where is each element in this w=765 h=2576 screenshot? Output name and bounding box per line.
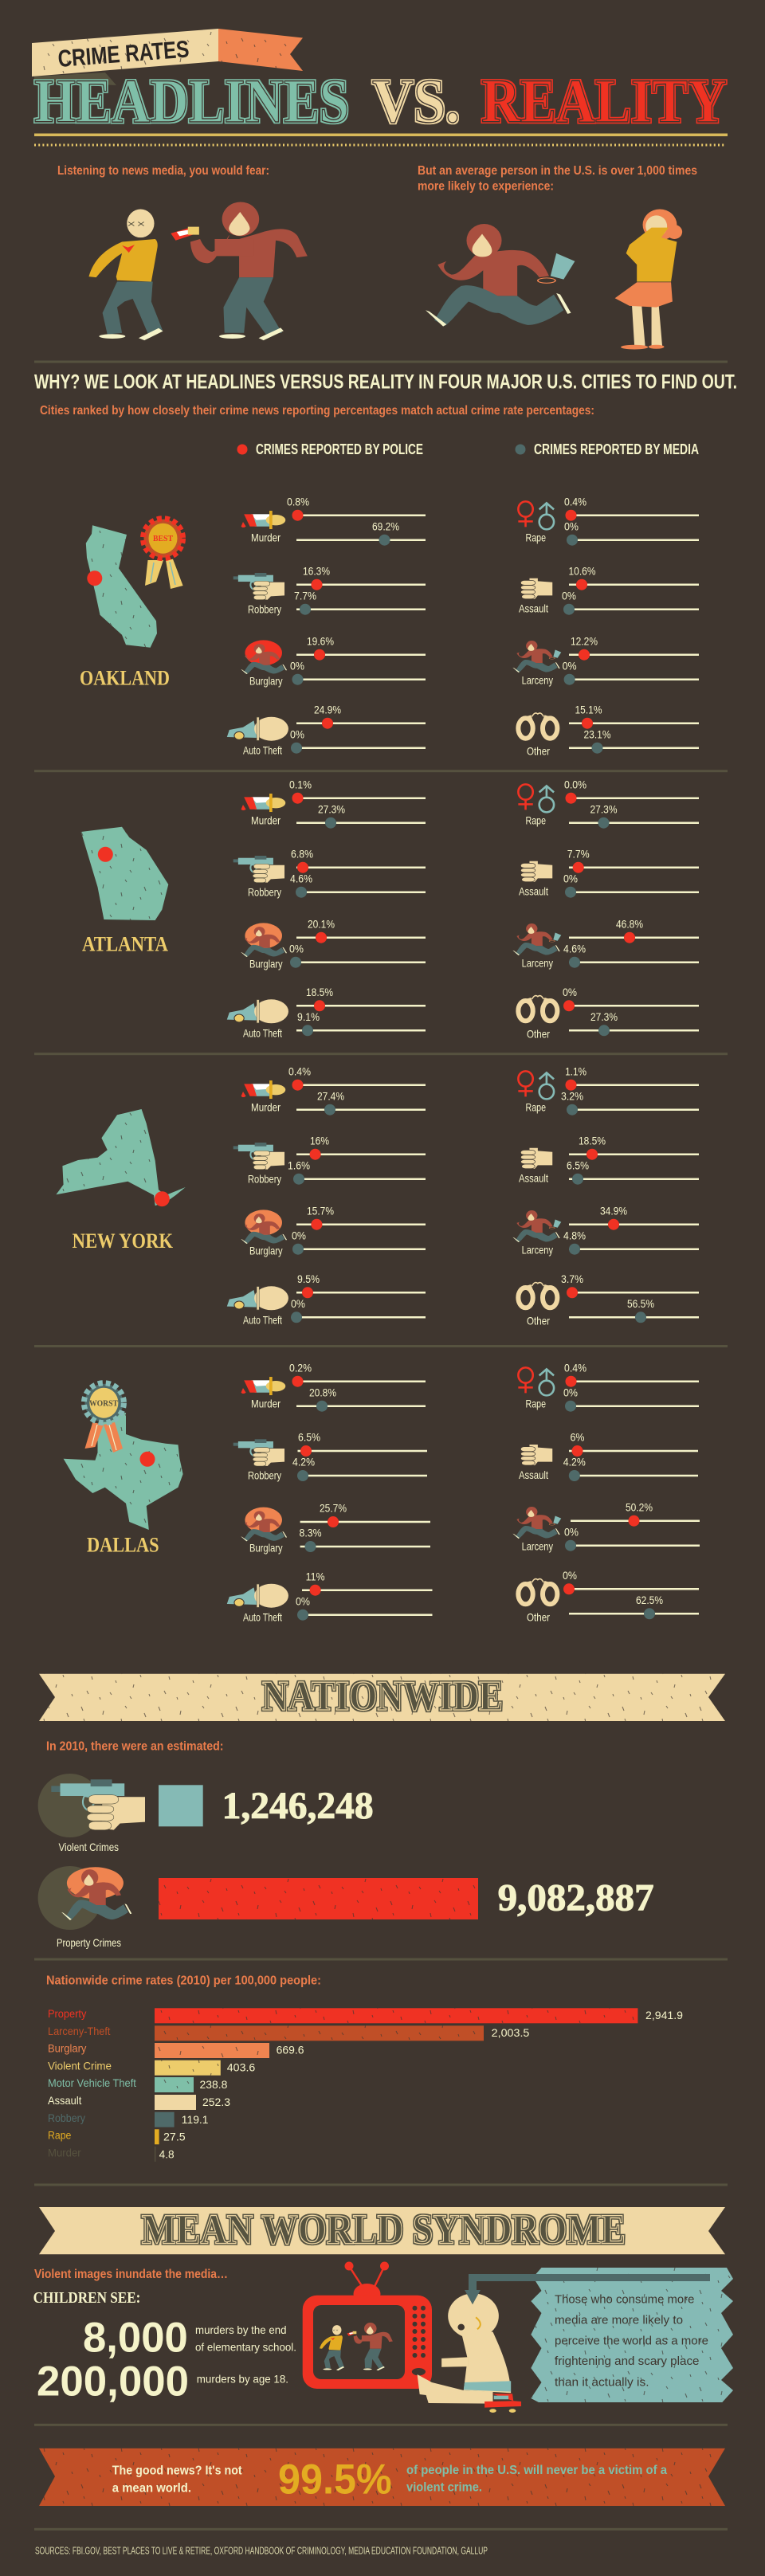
stat: 8,000 — [83, 2315, 296, 2362]
bar: larceny-theft: 2,003.5 — [492, 2026, 530, 2039]
row: robbery — [233, 847, 426, 898]
row: other: Other — [527, 1610, 550, 1623]
row: burglary: Burglary — [249, 957, 283, 970]
bar: assault — [48, 2094, 230, 2110]
row: assault — [519, 1431, 698, 1481]
city name: Atlanta: ATLANTA — [82, 932, 168, 955]
row: robbery: 4.2% — [292, 1456, 315, 1468]
row: burglary: Burglary — [249, 1244, 283, 1257]
row: auto theft: 9.5% — [297, 1272, 320, 1285]
row: other — [518, 1569, 699, 1623]
row: murder: Murder — [251, 531, 280, 544]
callout: media perception — [531, 2268, 733, 2402]
bar: murder — [48, 2146, 175, 2162]
row: assault — [519, 564, 699, 615]
subheading: violent images: Violent images inundate the media… — [34, 2268, 228, 2281]
row: murder: 69.2% — [372, 520, 399, 532]
row: auto theft: 18.5% — [306, 986, 333, 998]
bar: murder: 4.8 — [159, 2147, 175, 2160]
row: murder: 0.4% — [288, 1065, 311, 1077]
intro text: experience: more likely to experience: — [418, 180, 554, 194]
banner: nationwide: NATIONWIDE — [262, 1673, 503, 1719]
row: assault: 0% — [563, 872, 578, 884]
banner: mean world syndrome: MEAN WORLD SYNDROME — [142, 2207, 626, 2253]
row: other: 27.3% — [590, 1010, 618, 1023]
row: assault: Assault — [519, 1468, 548, 1481]
legend: police — [237, 441, 423, 457]
callout: media perception: perceive the world as a more — [555, 2335, 708, 2348]
row: rape: 1.1% — [565, 1065, 586, 1077]
stat: 200,000 — [37, 2358, 288, 2405]
stat: 200,000: 200,000 — [37, 2358, 189, 2405]
row: murder: 0.8% — [287, 495, 309, 508]
row: other: Other — [527, 1027, 550, 1040]
label: violent crimes: Violent Crimes — [59, 1841, 119, 1853]
row: murder — [241, 1361, 426, 1412]
row: murder: 20.8% — [309, 1386, 336, 1398]
row: auto theft: 9.1% — [297, 1010, 320, 1023]
row: burglary: 19.6% — [307, 634, 334, 647]
row: assault: 7.7% — [567, 847, 590, 860]
row: robbery: 16% — [310, 1134, 329, 1147]
row: larceny: Larceny — [522, 956, 553, 969]
banner: nationwide — [39, 1673, 725, 1721]
row: murder: Murder — [251, 814, 280, 827]
banner: good news: The good news? It's not — [112, 2464, 242, 2478]
row: larceny: 12.2% — [571, 634, 598, 647]
row: auto theft — [227, 1272, 426, 1326]
row: larceny — [512, 1204, 699, 1256]
panel: Dallas — [64, 1361, 700, 1624]
title: HEADLINES — [34, 66, 349, 135]
bar: larceny-theft: Larceny-Theft — [48, 2025, 110, 2037]
bar: assault: Assault — [48, 2094, 81, 2107]
bar: motor vehicle theft: 238.8 — [199, 2078, 228, 2091]
row: burglary — [241, 917, 426, 970]
bar: violent crimes — [159, 1785, 203, 1826]
row: other: 15.1% — [575, 703, 602, 716]
number: property crimes: 9,082,887 — [498, 1877, 654, 1919]
intro text: experience: But an average person in the U.S. is over 1,000 times — [418, 164, 697, 178]
callout: media perception: Those who consume more — [555, 2294, 694, 2307]
bar: property: Property — [48, 2007, 86, 2020]
row: robbery: 7.7% — [294, 589, 316, 602]
row: other: 62.5% — [636, 1594, 663, 1606]
subheading: ranking: Cities ranked by how closely their crime news reporting percentages match actual crime rate percentages: — [40, 404, 594, 418]
label: property crimes: Property Crimes — [57, 1936, 121, 1949]
row: robbery — [233, 1431, 427, 1482]
row: robbery: Robbery — [248, 885, 281, 898]
row: larceny: 50.2% — [626, 1500, 653, 1513]
row: rape — [518, 495, 699, 546]
banner: good news: 99.5% — [278, 2456, 392, 2503]
row: larceny: 4.6% — [563, 942, 586, 955]
bar: robbery: Robbery — [48, 2111, 85, 2124]
bar: larceny-theft — [48, 2025, 530, 2041]
banner: good news — [39, 2449, 725, 2506]
bar: rape: 27.5 — [163, 2131, 186, 2143]
row: murder: 27.3% — [318, 802, 345, 815]
row: assault: Assault — [519, 885, 548, 898]
stat: 8,000: murders by the end — [195, 2323, 287, 2336]
row: larceny: 46.8% — [616, 917, 643, 930]
row: assault: Assault — [519, 1172, 548, 1185]
row: auto theft — [227, 986, 426, 1039]
illustration: baby with toy car — [412, 2293, 521, 2413]
banner: good news: of people in the U.S. will never be a victim of a — [406, 2464, 667, 2477]
illustration: television — [303, 2261, 432, 2389]
bar: robbery — [48, 2111, 209, 2127]
row: robbery: Robbery — [248, 1469, 281, 1482]
row: robbery: Robbery — [248, 602, 281, 615]
bar: violent crime: 403.6 — [227, 2060, 256, 2073]
icon: property crimes thief — [38, 1866, 131, 1930]
row: auto theft — [227, 1570, 432, 1624]
row: robbery: 4.6% — [290, 872, 312, 884]
illustration: thief running with bag — [426, 224, 575, 327]
bar: assault: 252.3 — [202, 2096, 230, 2108]
row: other: 0% — [563, 986, 577, 998]
city name: New York: NEW YORK — [73, 1229, 174, 1253]
title: REALITY — [481, 66, 727, 135]
bar: property — [48, 2007, 683, 2023]
banner: crime rates: CRIME RATES — [57, 36, 190, 73]
bar: motor vehicle theft: Motor Vehicle Theft — [48, 2076, 136, 2089]
row: auto theft: Auto Theft — [243, 1026, 282, 1039]
row: burglary: Burglary — [249, 1542, 283, 1555]
row: auto theft: 0% — [290, 727, 304, 740]
intro text: experience — [418, 164, 697, 194]
row: other: Other — [527, 1314, 550, 1327]
title: VS. — [372, 66, 460, 135]
row: assault: Assault — [519, 602, 548, 615]
row: auto theft: Auto Theft — [243, 1313, 282, 1326]
row: rape: Rape — [526, 1100, 546, 1113]
subheading: crime rates per 100,000: Nationwide crime rates (2010) per 100,000 people: — [46, 1974, 321, 1988]
row: auto theft: 0% — [291, 1297, 305, 1310]
row: other: Other — [527, 745, 550, 758]
row: rape: Rape — [526, 1397, 546, 1410]
row: larceny: 34.9% — [600, 1204, 627, 1217]
icon: violent crimes gun — [38, 1774, 145, 1837]
row: burglary: Burglary — [249, 674, 283, 687]
row: robbery: 16.3% — [303, 564, 330, 577]
title — [34, 66, 727, 135]
row: other — [518, 703, 699, 758]
bar: robbery: 119.1 — [182, 2113, 209, 2126]
row: assault: 10.6% — [569, 564, 596, 577]
row: larceny: 0% — [563, 659, 577, 672]
row: auto theft: 24.9% — [314, 703, 341, 716]
badge: worst: WORST — [89, 1399, 119, 1409]
map: New York state — [56, 1109, 186, 1206]
stat: 200,000: murders by age 18. — [197, 2373, 288, 2386]
row: rape — [518, 778, 699, 829]
banner: crime rates — [32, 29, 303, 85]
row: murder — [241, 1065, 426, 1115]
row: auto theft: 0% — [296, 1594, 310, 1607]
map: Georgia — [81, 827, 168, 920]
subheading: estimated: In 2010, there were an estimated: — [46, 1740, 223, 1754]
row: rape: 0% — [564, 520, 579, 532]
row: assault: 4.2% — [563, 1456, 586, 1468]
row: rape: 27.3% — [590, 802, 617, 815]
panel: New York — [56, 1065, 699, 1327]
row: murder — [241, 778, 426, 829]
bar: burglary — [48, 2042, 304, 2058]
bar: rape: Rape — [48, 2129, 72, 2142]
bar: murder: Murder — [48, 2146, 81, 2158]
heading: children see: CHILDREN SEE: — [33, 2289, 140, 2307]
row: rape: 0.4% — [564, 1361, 586, 1374]
row: rape — [518, 1065, 699, 1115]
row: rape: 0.4% — [564, 495, 586, 508]
bar: burglary: 669.6 — [277, 2044, 304, 2056]
stat: 8,000: of elementary school. — [195, 2341, 296, 2354]
row: rape: Rape — [526, 531, 546, 543]
row: assault: 18.5% — [579, 1134, 606, 1147]
row: burglary — [241, 1204, 426, 1257]
map: Texas — [64, 1413, 183, 1530]
banner: good news: violent crime. — [406, 2481, 482, 2495]
city name: Dallas: DALLAS — [87, 1533, 159, 1556]
row: assault: 6% — [571, 1431, 585, 1444]
row: larceny: Larceny — [522, 1243, 553, 1256]
callout: media perception: than it actually is. — [555, 2376, 649, 2389]
bar: property crimes — [159, 1878, 478, 1919]
row: rape: 3.2% — [561, 1089, 583, 1102]
bar chart: nationwide rates — [48, 2007, 683, 2162]
row: robbery: 6.8% — [291, 847, 313, 860]
row: auto theft: 11% — [306, 1570, 325, 1582]
illustration: frightened woman — [615, 209, 682, 350]
stat: 8,000: 8,000 — [83, 2315, 188, 2362]
row: murder — [241, 495, 426, 546]
row: rape: Rape — [526, 814, 546, 826]
row: assault: 0% — [562, 589, 576, 602]
row: murder: Murder — [251, 1101, 280, 1114]
row: burglary: 20.1% — [308, 917, 335, 930]
row: burglary: 25.7% — [320, 1502, 347, 1515]
panel: Oakland — [80, 495, 699, 758]
legend: police: CRIMES REPORTED BY POLICE — [256, 441, 423, 457]
row: assault: 6.5% — [567, 1159, 589, 1171]
legend: media: CRIMES REPORTED BY MEDIA — [534, 441, 699, 457]
callout: media perception: media are more likely to — [555, 2315, 683, 2327]
row: burglary: 15.7% — [307, 1204, 334, 1217]
row: auto theft: Auto Theft — [243, 744, 282, 757]
bar: burglary: Burglary — [48, 2042, 86, 2055]
row: robbery: 1.6% — [288, 1159, 310, 1171]
intro text: fear: Listening to news media, you would fear: — [57, 164, 269, 178]
row: burglary — [241, 1502, 430, 1555]
row: other: 0% — [563, 1569, 577, 1582]
row: larceny: 0% — [564, 1525, 579, 1538]
row: burglary: 8.3% — [300, 1527, 322, 1539]
city name: Oakland: OAKLAND — [80, 666, 170, 689]
row: murder: Murder — [251, 1398, 280, 1410]
row: assault — [519, 847, 699, 898]
row: larceny — [512, 1500, 700, 1552]
sources: SOURCES: FBI.GOV, BEST PLACES TO LIVE & RETIRE, OXFORD HANDBOOK OF CRIMINOLOGY, MEDIA EDUCATION FOUNDATION, GALLUP — [35, 2545, 488, 2557]
illustration: victim and attacker — [88, 202, 308, 340]
row: burglary: 0% — [292, 1229, 306, 1241]
badge: worst — [84, 1383, 124, 1453]
panel: Atlanta — [81, 778, 699, 1040]
row: larceny: Larceny — [522, 1539, 553, 1552]
bar: property: 2,941.9 — [645, 2009, 683, 2021]
arrow: from callout to baby — [465, 2274, 710, 2304]
row: burglary — [241, 634, 426, 687]
badge: best: BEST — [153, 534, 174, 543]
row: larceny: Larceny — [522, 673, 553, 686]
row: burglary: 0% — [290, 659, 304, 672]
badge: best — [143, 519, 183, 589]
bar: violent crime: Violent Crime — [48, 2059, 112, 2072]
row: larceny: 4.8% — [563, 1229, 586, 1241]
bar: motor vehicle theft — [48, 2076, 228, 2092]
row: murder: 27.4% — [317, 1089, 344, 1102]
row: robbery — [233, 564, 426, 615]
callout: media perception: frightening and scary place — [555, 2355, 700, 2368]
row: other — [518, 1272, 699, 1327]
row: assault — [519, 1134, 699, 1185]
row: rape — [518, 1361, 699, 1412]
row: murder: 0.1% — [289, 778, 312, 790]
row: other: 23.1% — [583, 727, 610, 740]
row: murder: 0.2% — [289, 1361, 312, 1374]
number: violent crimes: 1,246,248 — [222, 1785, 374, 1827]
row: larceny — [512, 917, 699, 969]
bar: violent crime — [48, 2059, 256, 2076]
row: larceny — [512, 634, 699, 686]
row: auto theft — [227, 703, 426, 757]
row: robbery: 6.5% — [298, 1431, 320, 1444]
row: robbery: Robbery — [248, 1172, 281, 1185]
row: robbery — [233, 1134, 426, 1185]
row: burglary: 0% — [289, 942, 304, 955]
row: other — [518, 986, 699, 1040]
map: California — [86, 525, 157, 648]
row: other: 56.5% — [627, 1297, 654, 1310]
row: rape: 0% — [563, 1386, 578, 1398]
row: other: 3.7% — [561, 1272, 583, 1285]
banner: good news: a mean world. — [112, 2481, 191, 2495]
bar: rape — [48, 2129, 186, 2144]
row: rape: 0.0% — [564, 778, 586, 790]
row: auto theft: Auto Theft — [243, 1611, 282, 1624]
